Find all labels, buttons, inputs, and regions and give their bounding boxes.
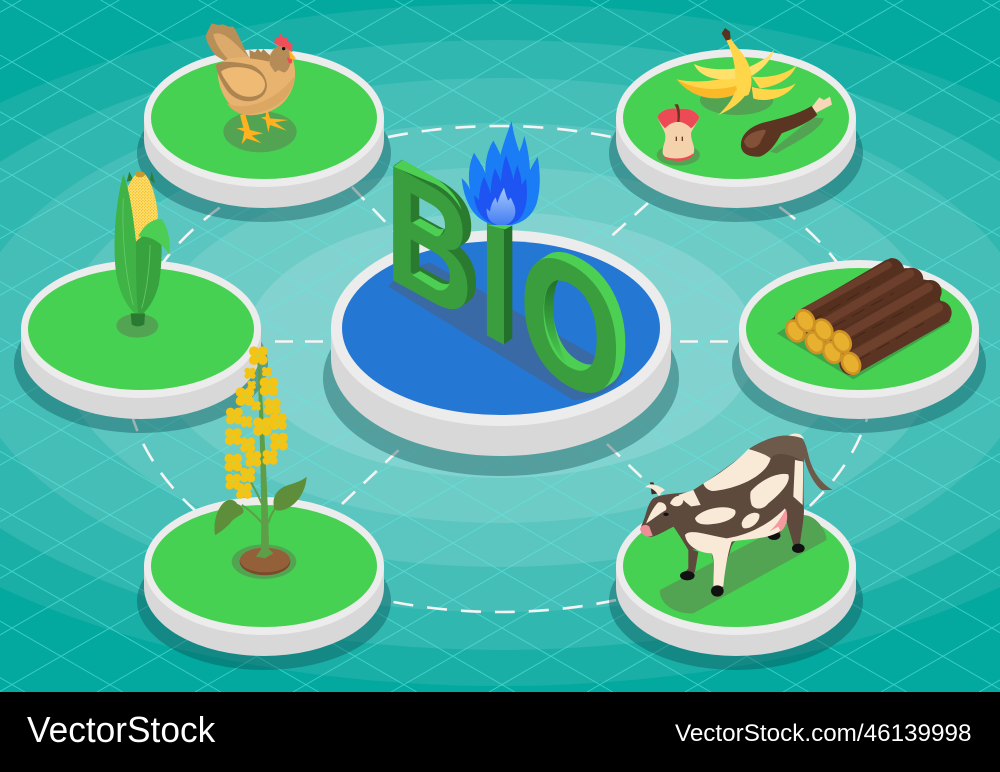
food waste — [657, 28, 832, 166]
platform: rapeseed base — [137, 497, 391, 670]
watermark left: VectorStock — [27, 709, 215, 750]
platform: waste base — [609, 49, 863, 222]
platform: logs base — [732, 260, 986, 433]
top of letter I — [487, 225, 513, 229]
platform: corn base — [14, 260, 268, 433]
corn — [115, 171, 170, 338]
log end rings — [783, 307, 864, 377]
3D letter O: O — [519, 202, 622, 450]
platform: cow base — [609, 497, 863, 670]
chicken — [206, 23, 297, 152]
dashed connections — [125, 126, 875, 612]
banana peel — [677, 28, 797, 115]
firewood logs — [777, 258, 952, 379]
footer bar — [0, 692, 1000, 772]
3D letter I: I — [479, 181, 512, 385]
watermark right: VectorStock.com/46139998 — [675, 720, 971, 747]
platform: central pool — [323, 230, 679, 476]
rapeseed plant — [214, 346, 307, 579]
highlights on letter B — [393, 160, 462, 290]
food shadows — [657, 85, 824, 166]
cow — [640, 433, 833, 613]
3D letter B: B — [385, 126, 473, 360]
flame — [462, 121, 540, 229]
shading inside letter O — [544, 280, 567, 365]
apple core — [657, 104, 699, 161]
platform: chicken base — [137, 49, 391, 222]
drumstick — [741, 97, 832, 157]
letter shadow on pool — [388, 263, 623, 400]
